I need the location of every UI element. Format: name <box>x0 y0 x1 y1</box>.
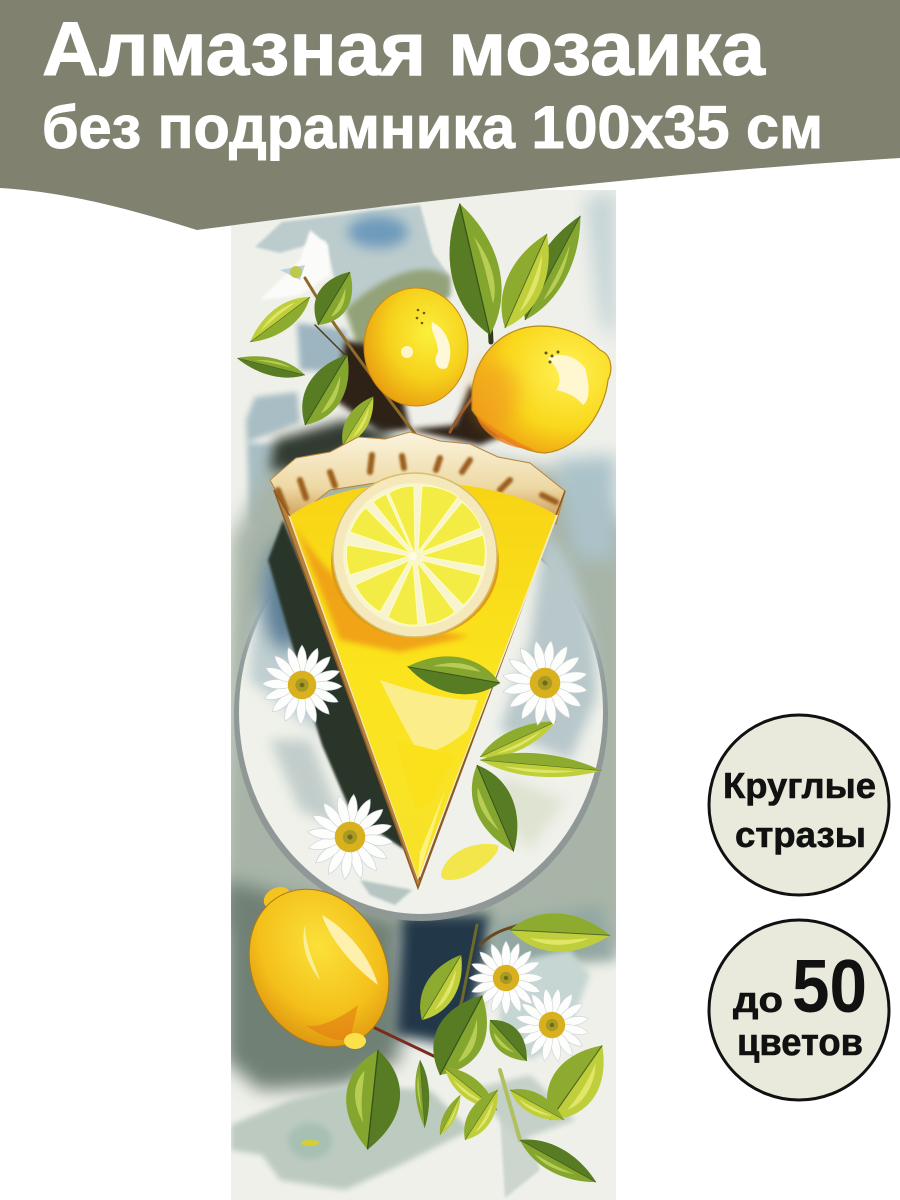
pie slice <box>270 432 565 888</box>
lemon juice drop <box>441 844 498 880</box>
title line 2: без подрамника 100х35 см <box>42 94 823 161</box>
plate <box>234 509 608 921</box>
daisies <box>262 635 595 1068</box>
pie shadow on plate <box>268 520 405 850</box>
crust rim <box>270 432 565 524</box>
yellow drop <box>301 1140 319 1146</box>
artwork: lemon tart watercolor <box>220 190 630 1200</box>
badge: round rhinestones: Круглые <box>723 765 876 806</box>
paper background <box>231 190 616 1200</box>
filling <box>290 483 556 878</box>
title line 1: Алмазная мозаика <box>42 7 766 92</box>
bottom leaves <box>341 911 621 1193</box>
top lemon right <box>472 326 611 453</box>
watercolor washes <box>220 190 630 1198</box>
title <box>42 7 823 161</box>
header banner <box>0 0 900 230</box>
badge: up to 50 colours <box>709 920 889 1100</box>
flower sketch top left <box>260 230 330 300</box>
badge: up to 50 colours: 50 <box>792 944 867 1028</box>
leaves: upper branch <box>235 198 595 451</box>
top lemon left <box>364 288 468 406</box>
plate leaves <box>404 649 603 859</box>
bottom lemon <box>248 887 390 1049</box>
badge: round rhinestones <box>709 715 889 895</box>
badge: up to 50 colours: до <box>733 979 783 1020</box>
lemon slice <box>331 473 499 638</box>
badge: up to 50 colours: цветов <box>737 1022 863 1064</box>
branches <box>305 278 520 1140</box>
crust edges <box>274 490 565 888</box>
badge: round rhinestones: стразы <box>735 814 866 855</box>
